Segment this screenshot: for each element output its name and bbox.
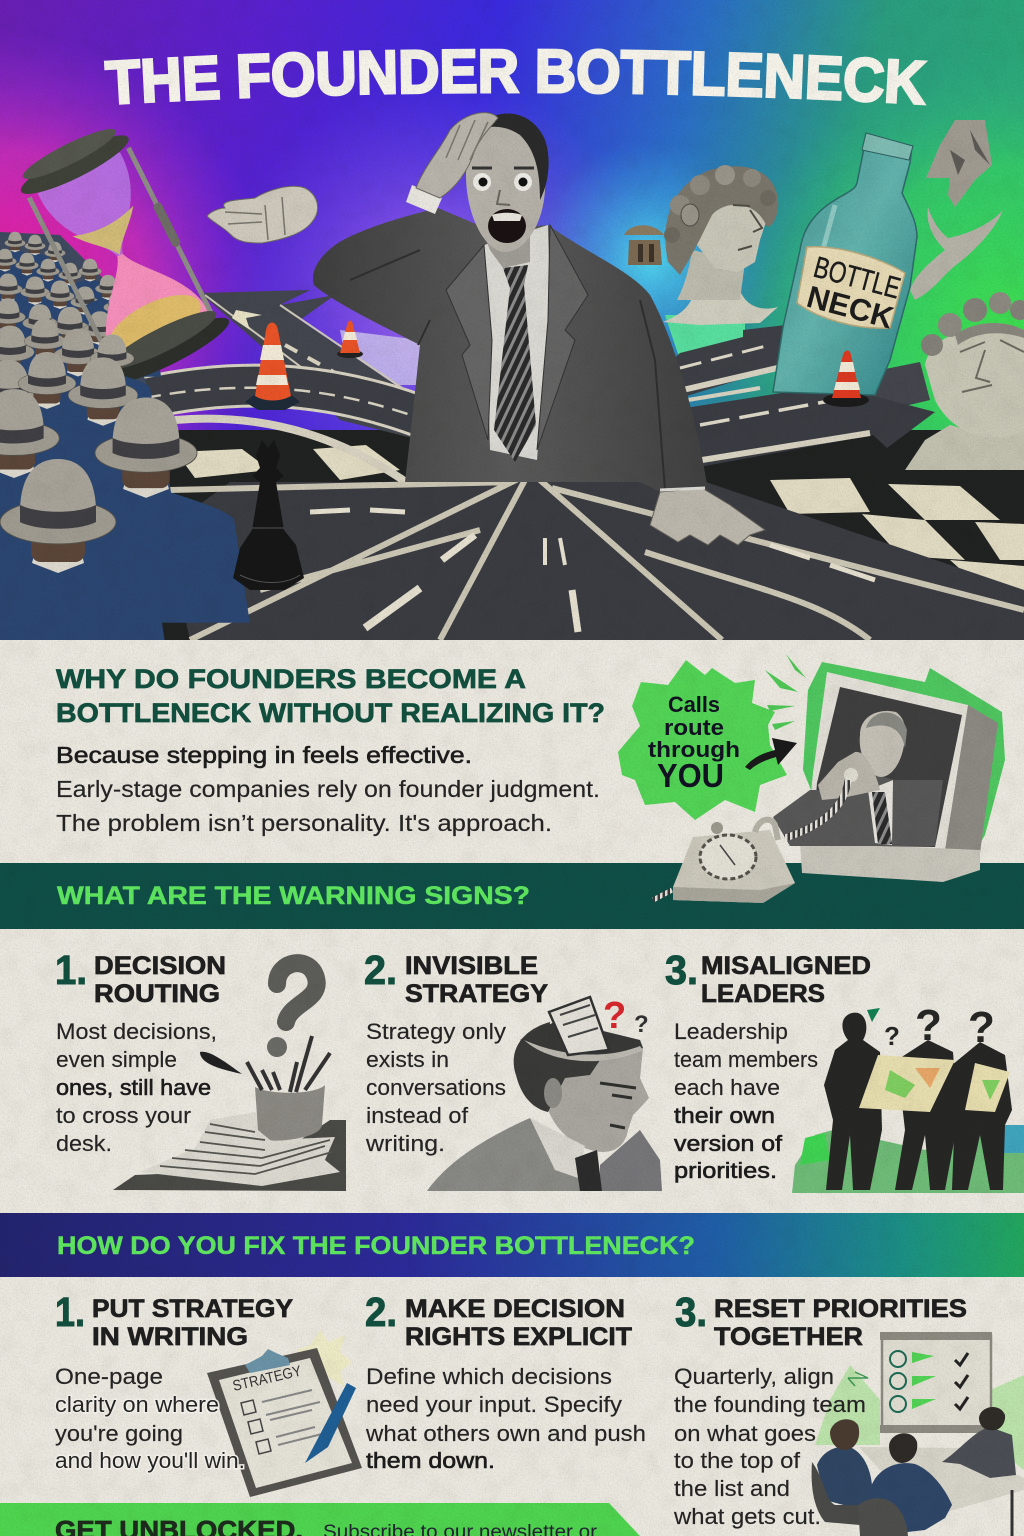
red question mark: ? <box>603 995 626 1037</box>
fix 2: them down. <box>366 1448 495 1473</box>
warning 1: ones, still have <box>56 1075 211 1100</box>
neck <box>486 236 530 268</box>
fix 3 text <box>673 1364 866 1529</box>
bottle label: NECK <box>803 279 898 336</box>
warning 1: 1. <box>55 947 87 993</box>
text block: Because stepping in feels effective. <box>56 742 472 768</box>
icon: right traffic cone <box>823 350 869 407</box>
callout: calls route through you <box>618 660 797 820</box>
hair <box>476 114 549 200</box>
icon: hourglass <box>20 129 229 380</box>
icon: rotary telephone <box>653 780 848 903</box>
warning 2: STRATEGY <box>405 980 548 1008</box>
checkerboard floor <box>130 430 1024 640</box>
fix 2: need your input. Specify <box>366 1392 622 1417</box>
chairs <box>812 1462 860 1525</box>
icon: chess king <box>233 440 304 590</box>
warning 2: exists in <box>366 1047 449 1072</box>
paper background <box>0 640 1024 1536</box>
mouth <box>488 209 526 243</box>
fix 1 text: you're going <box>55 1421 183 1446</box>
cuff <box>406 185 442 214</box>
warning 3: priorities. <box>674 1158 777 1183</box>
people <box>817 1447 872 1510</box>
heading: BOTTLENECK WITHOUT REALIZING IT? <box>56 698 605 728</box>
heading <box>56 664 605 728</box>
arrow <box>745 738 797 770</box>
panel: why founders become a bottleneck <box>56 664 605 836</box>
icon: three leaders with maps: ? <box>884 1021 900 1051</box>
fix 1 text: One-page <box>55 1364 163 1389</box>
icon: green call dashes <box>765 654 806 730</box>
icon: stone fragment <box>926 120 992 207</box>
warning 1 <box>55 947 346 1191</box>
fix 1 text: and how you'll win. <box>55 1448 245 1473</box>
warning 2: writing. <box>365 1131 445 1156</box>
warning 3: version of <box>674 1131 783 1156</box>
fix 3 text: what gets cut. <box>673 1504 821 1529</box>
warning 3: MISALIGNED <box>701 952 871 980</box>
roads: left sweep <box>145 386 430 492</box>
man panicking <box>313 113 765 545</box>
warning 2: instead of <box>366 1103 469 1128</box>
fix 3 text: the list and <box>674 1476 790 1501</box>
band: how to fix: HOW DO YOU FIX THE FOUNDER BOTTLENECK? <box>57 1232 695 1260</box>
warning 1: desk. <box>56 1131 112 1156</box>
title: THE FOUNDER BOTTLENECK <box>104 48 928 106</box>
warning 2: 2. <box>364 947 397 993</box>
icon: small traffic cone <box>337 320 363 358</box>
panel: hero illustration <box>0 0 1024 640</box>
warning 1: to cross your <box>56 1103 191 1128</box>
fix 3: 3. <box>675 1289 707 1335</box>
big question mark <box>277 963 317 1022</box>
callout: calls route through you: through <box>648 737 740 762</box>
icon: retro monitor with man on phone <box>773 662 1005 882</box>
warning 3: 3. <box>665 947 698 993</box>
fix 2: what others own and push <box>365 1421 646 1446</box>
warning 2: conversations <box>366 1075 506 1100</box>
man on phone <box>773 711 943 846</box>
roads: upper left arrow road <box>200 290 425 440</box>
icon: floating hand <box>207 186 318 243</box>
fix 1 text: clarity on where <box>55 1392 219 1417</box>
fix 2: MAKE DECISION <box>405 1295 625 1323</box>
icon: statue hand <box>910 207 1003 300</box>
warning 3 <box>665 947 1024 1193</box>
band: how to fix <box>0 1213 1024 1277</box>
fix 3 text: Quarterly, align <box>674 1364 834 1389</box>
whiteboard <box>880 1332 992 1433</box>
icon: desk with pen cup and papers <box>113 963 346 1191</box>
fix 1 text <box>55 1364 245 1473</box>
warning 3: LEADERS <box>701 980 825 1008</box>
roads: converging fan <box>165 478 1024 640</box>
panel: warning signs <box>55 947 1024 1193</box>
lapels <box>446 245 492 440</box>
tie <box>494 265 536 462</box>
fix 1 <box>55 1289 362 1497</box>
fix 2 <box>365 1289 646 1473</box>
fix 1: IN WRITING <box>92 1323 248 1351</box>
icon: three leaders with maps: ? <box>968 1003 995 1052</box>
warning 2 <box>364 947 662 1191</box>
text block: Early-stage companies rely on founder judgment. <box>56 776 600 802</box>
warning 3: their own <box>674 1103 775 1128</box>
warning 3: Leadership <box>674 1019 788 1044</box>
callout: calls route through you: YOU <box>657 757 724 794</box>
callout: calls route through you: route <box>664 715 724 740</box>
icon: strategy clipboard <box>207 1330 362 1497</box>
warning 3: team members <box>674 1047 818 1072</box>
icon: large traffic cone <box>245 322 300 410</box>
fix 3 text: the founding team <box>674 1392 866 1417</box>
far crowd <box>0 232 161 384</box>
shirt <box>484 225 550 460</box>
pen <box>305 1383 356 1463</box>
fix 3 <box>673 1289 1024 1536</box>
roads: right arrows <box>676 325 935 466</box>
icon: open head with strategy document <box>427 995 662 1191</box>
bottle label: BOTTLE <box>810 251 904 306</box>
warning 2: Strategy only <box>366 1019 506 1044</box>
callout: calls route through you: Calls <box>668 692 720 717</box>
warning 1: ROUTING <box>94 980 220 1008</box>
bottle label <box>797 247 905 336</box>
fix 2: Define which decisions <box>366 1364 612 1389</box>
fix 1: PUT STRATEGY <box>92 1295 293 1323</box>
band: warning signs <box>0 863 1024 929</box>
lower hand <box>650 488 765 545</box>
warning 3: each have <box>674 1075 780 1100</box>
icon: three leaders with maps <box>792 1001 1024 1193</box>
fix 3 text: to the top of <box>674 1448 801 1473</box>
icon: bottle <box>773 133 917 395</box>
icon: domed tower <box>624 225 664 265</box>
text block <box>56 742 600 836</box>
fix 3: TOGETHER <box>714 1323 863 1351</box>
small question mark: ? <box>634 1011 649 1038</box>
icon: three leaders with maps: ? <box>915 1001 942 1050</box>
warning 2: INVISIBLE <box>405 952 538 980</box>
crowd of men in bowler hats <box>0 319 250 640</box>
text block: The problem isn’t personality. It's approach. <box>56 810 552 836</box>
heading: WHY DO FOUNDERS BECOME A <box>56 664 526 694</box>
warning 1: Most decisions, <box>56 1019 217 1044</box>
fix 2: 2. <box>365 1289 397 1335</box>
band: warning signs: WHAT ARE THE WARNING SIGNS? <box>57 882 530 910</box>
footer call to action <box>0 1503 640 1536</box>
fix 3: RESET PRIORITIES <box>714 1295 967 1323</box>
panel: fixes <box>55 1289 1024 1536</box>
icon: team meeting with whiteboard <box>812 1332 1024 1536</box>
jacket <box>313 208 708 492</box>
warning 1: even simple <box>56 1047 177 1072</box>
head <box>466 119 546 252</box>
fix 1: 1. <box>55 1289 85 1335</box>
fix 3 text: on what goes <box>674 1421 816 1446</box>
map <box>859 1055 955 1112</box>
table <box>859 1447 1024 1518</box>
fix 2: RIGHTS EXPLICIT <box>405 1323 632 1351</box>
icon: statue head <box>663 165 778 325</box>
eyes <box>473 173 491 191</box>
icon: strategy clipboard: STRATEGY <box>231 1363 303 1395</box>
warning 1: DECISION <box>94 952 226 980</box>
ink drop <box>200 1052 242 1074</box>
raised hand <box>416 113 498 198</box>
icon: fallen statue head <box>905 292 1024 470</box>
